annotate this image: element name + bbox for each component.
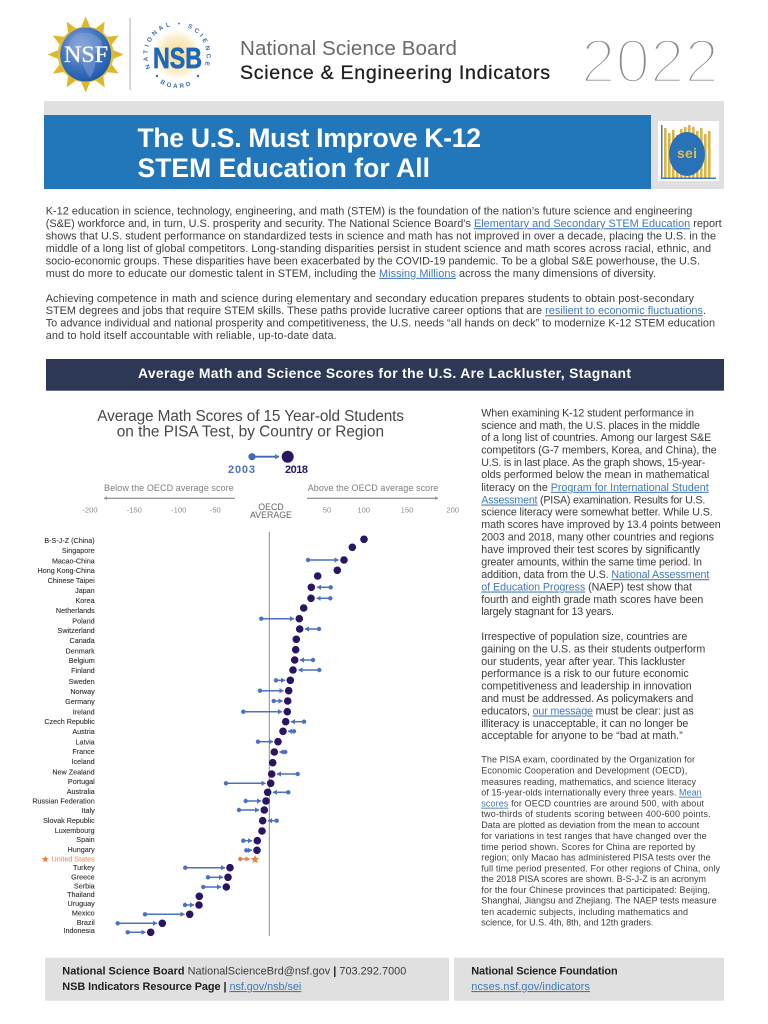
text block: introduction paragraph 1: middle of a long list of global competitors. Long-standing disparities persist in student science and math scores across racial, ethnic, and <box>46 243 711 255</box>
row: Denmark <box>66 646 300 656</box>
row: Latvia <box>76 738 282 746</box>
row: Turkey: Turkey <box>73 863 95 872</box>
text block: right column paragraph 1: have improved their test scores by significantly <box>481 544 701 556</box>
chart title <box>97 408 404 441</box>
row: United States <box>42 854 259 864</box>
divider <box>130 18 131 90</box>
row: Indonesia <box>64 926 154 936</box>
text block: right column paragraph 1: math scores have improved by 13.4 points between <box>481 519 721 531</box>
header: organization names <box>240 37 550 84</box>
text block: introduction paragraph 2 <box>46 293 715 342</box>
text block: right column paragraph 1: literacy on the Program for International Student <box>481 482 709 494</box>
title: The U.S. Must Improve K-12 <box>138 123 481 153</box>
header: organization names: National Science Board <box>240 37 457 60</box>
row: Australia: Australia <box>67 787 95 796</box>
text block: right column paragraph 1: addition, data from the U.S. National Assessment <box>481 569 709 581</box>
icon: SEI logo: sei <box>677 145 697 161</box>
section heading bar <box>46 359 724 391</box>
OECD average label <box>250 502 292 520</box>
row: Hungary: Hungary <box>68 845 95 854</box>
row: Canada: Canada <box>70 636 95 645</box>
row: Poland <box>72 615 303 626</box>
text block: right column paragraph 1 <box>481 408 721 618</box>
row: Thailand <box>67 890 203 900</box>
text block: right column paragraph 1: Assessment (PISA) examination. Results for U.S. <box>481 494 705 506</box>
row: Macao-China: Macao-China <box>52 556 95 566</box>
chart legend: 2018 <box>285 464 308 476</box>
OECD average label: AVERAGE <box>250 510 292 520</box>
axis tick labels: -100 <box>171 506 186 514</box>
text block: right column paragraph 2: illiteracy is unacceptable, it can no longer be <box>481 718 688 730</box>
row: Chinese Taipei: Chinese Taipei <box>48 576 95 585</box>
footer panel: National Science Board: National Science Board NationalScienceBrd@nsf.gov | 703.292.7000 <box>62 966 406 978</box>
text block: right column paragraph 1: largely stagnant for 13 years. <box>481 606 614 618</box>
axis tick labels: 200 <box>446 506 459 514</box>
row: New Zealand <box>52 768 300 778</box>
row: Belgium: Belgium <box>69 656 95 665</box>
axis direction: above average <box>307 483 438 498</box>
text block: right column paragraph 2: our students, year after year. This lackluster <box>481 656 686 668</box>
text block: methodology note: Economic Cooperation and Development (OECD), <box>481 766 687 776</box>
text block: methodology note: two-thirds of students scoring between 400-600 points. <box>481 809 711 819</box>
text block: introduction paragraph 1: must do more to educate our domestic talent in STEM, including the Missing Millions across the many dimensions of diversity. <box>46 268 656 280</box>
text block: methodology note: for variations in test ranges that have changed over the <box>481 831 707 841</box>
text block: methodology note: ten academic subjects, including mathematics and <box>481 907 688 917</box>
footer panel: National Science Board: NSB Indicators Resource Page | nsf.gov/nsb/sei <box>62 981 301 993</box>
row: Slovak Republic: Slovak Republic <box>43 816 95 825</box>
OECD average reference line <box>268 532 270 936</box>
row: Sweden: Sweden <box>69 677 95 686</box>
row: Serbia: Serbia <box>74 882 95 890</box>
row: Hong Kong-China <box>38 566 341 575</box>
text block: methodology note: measures reading, mathematics, and science literacy <box>481 777 696 787</box>
row: Uruguay <box>68 899 203 909</box>
footer panel: National Science Foundation <box>454 958 724 1001</box>
row: France: France <box>72 747 95 756</box>
text block: introduction paragraph 2: To advance individual and national prosperity and competitiveness, the U.S. needs “all hands on deck” to modernize K-12 STEM education <box>46 318 715 330</box>
section heading bar: Average Math and Science Scores for the U.S. Are Lackluster, Stagnant <box>138 365 631 381</box>
row: Denmark: Denmark <box>66 646 95 656</box>
text block: right column paragraph 2 <box>481 631 705 742</box>
text block: right column paragraph 2: acceptable for anyone to be “bad at math.” <box>481 730 683 742</box>
text block: introduction paragraph 2: Achieving competence in math and science during elementary and secondary education prepares students to obtain post-secondary <box>46 293 695 305</box>
text block: methodology note: of 15-year-olds internationally every three years. Mean <box>481 788 702 798</box>
row: Switzerland <box>58 625 321 635</box>
row: Poland: Poland <box>72 616 95 626</box>
row: Finland: Finland <box>71 666 95 675</box>
text block: right column paragraph 1: science and math, the U.S. places in the middle <box>481 420 700 432</box>
text block: introduction paragraph 1: shows that U.S. student performance on standardized tests in science and math has not improved in over a decade, placing the U.S. in the <box>46 230 716 242</box>
row: Hong Kong-China: Hong Kong-China <box>38 566 95 575</box>
axis tick labels: 150 <box>401 506 413 514</box>
row: United States: United States <box>52 854 95 864</box>
row: Iceland: Iceland <box>72 757 95 766</box>
row: Canada <box>70 636 300 645</box>
text block: methodology note: region; only Macao has administered PISA tests over the <box>481 852 711 862</box>
icon: NSF logo: NSF <box>64 42 108 67</box>
footer panel: National Science Foundation: ncses.nsf.gov/indicators <box>471 981 591 993</box>
header: logos <box>48 16 211 92</box>
text block: methodology note: scores for OECD countries are around 500, with about <box>481 799 704 809</box>
icon: SEI logo <box>658 121 719 181</box>
footer panel: National Science Board <box>45 958 449 1001</box>
text block: introduction paragraph 1: K-12 education in science, technology, engineering, and math (STEM) is the foundation of the nation’s future science and engineering <box>46 206 692 218</box>
axis tick labels: -150 <box>127 506 142 514</box>
row: Belgium <box>69 656 315 665</box>
text block: methodology note: full time period presented. For other regions of China, only <box>481 864 720 874</box>
row: Indonesia: Indonesia <box>64 926 95 935</box>
text block: methodology note: the 2018 PISA scores are shown. B-S-J-Z is an acronym <box>481 874 706 884</box>
icon: NSB logo <box>143 22 211 88</box>
axis tick labels: -200 <box>82 506 98 514</box>
row: Iceland <box>72 757 277 766</box>
text block: right column paragraph 1: fourth and eighth grade math scores have been <box>481 594 703 606</box>
text block: introduction paragraph 2: STEM degrees and jobs that require STEM skills. These paths provide lucrative career options that are resilient to economic fluctuations. <box>46 305 706 317</box>
chart legend: 2003 <box>228 464 255 476</box>
row: Luxembourg: Luxembourg <box>55 826 95 835</box>
text block: right column paragraph 2: educators, our message must be clear: just as <box>481 706 694 718</box>
chart: dumbbell plot of country scores <box>32 532 368 936</box>
row: Spain: Spain <box>76 835 95 844</box>
icon: NSF logo <box>48 16 124 92</box>
OECD average label: OECD <box>258 502 284 512</box>
row: Slovak Republic <box>43 816 279 825</box>
row: B-S-J-Z (China) <box>44 536 368 545</box>
row: Singapore <box>62 544 356 555</box>
text block: right column paragraph 1: competitors (G-7 members, Korea, and China), the <box>481 444 717 456</box>
icon: NSB logo: NSB <box>153 43 202 75</box>
row: Mexico: Mexico <box>72 908 95 918</box>
title: STEM Education for All <box>138 153 430 183</box>
text block: right column paragraph 2: gaining on the U.S. as their students outperform <box>481 644 705 656</box>
row: Netherlands <box>56 604 308 615</box>
row: Norway <box>70 687 293 696</box>
row: Portugal <box>68 777 275 787</box>
row: Macao-China <box>52 556 348 566</box>
row: New Zealand: New Zealand <box>52 768 95 776</box>
icon: NSB logo: NATIONAL • SCIENCE <box>143 22 211 70</box>
year: 2022: 2022 <box>581 28 719 96</box>
row: Chinese Taipei <box>48 572 322 585</box>
header: organization names: Science & Engineering Indicators <box>240 62 550 84</box>
row: Australia <box>67 787 290 796</box>
row: Mexico <box>72 908 194 918</box>
row: Sweden <box>69 676 294 686</box>
text block: methodology note: The PISA exam, coordinated by the Organization for <box>481 755 695 765</box>
row: Serbia <box>74 882 230 891</box>
row: Japan <box>75 584 333 595</box>
footer panel: National Science Foundation: National Science Foundation <box>471 966 618 978</box>
row: Russian Federation <box>32 796 270 806</box>
text block: right column paragraph 1: science literacy were somewhat better. While U.S. <box>481 506 713 518</box>
row: Brazil: Brazil <box>77 918 95 927</box>
row: Greece: Greece <box>71 872 95 882</box>
row: Netherlands: Netherlands <box>56 606 95 615</box>
row: Czech Republic: Czech Republic <box>44 717 95 726</box>
chart title: Average Math Scores of 15 Year-old Students <box>97 408 404 425</box>
text block: right column paragraph 1: U.S. is in last place. As the graph shows, 15-year- <box>481 457 706 469</box>
text block: right column paragraph 1: 2003 and 2018, many other countries and regions <box>481 532 714 544</box>
row: Portugal: Portugal <box>68 777 95 786</box>
text block: right column paragraph 1: olds performed below the mean in mathematical <box>481 469 709 481</box>
row: Norway: Norway <box>70 687 95 696</box>
text block: right column paragraph 1: of a long list of countries. Among our largest S&E <box>481 432 711 444</box>
title <box>138 123 481 183</box>
row: Germany: Germany <box>65 697 95 706</box>
row: Italy <box>82 806 268 815</box>
text block: methodology note: science, for U.S. 4th, 8th, and 12th graders. <box>481 918 653 928</box>
row: Uruguay: Uruguay <box>68 899 95 908</box>
axis tick labels: 100 <box>357 506 370 514</box>
text block: right column paragraph 1: of Education Progress (NAEP) test show that <box>481 582 692 594</box>
text block: right column paragraph 2: and must be addressed. As policymakers and <box>481 693 693 705</box>
row: Finland <box>71 666 321 675</box>
row: Ireland: Ireland <box>73 708 95 716</box>
row: Austria: Austria <box>72 727 95 736</box>
row: Switzerland: Switzerland <box>58 626 95 635</box>
icon: NSB logo: BOARD <box>160 80 190 88</box>
row: Japan: Japan <box>75 586 95 595</box>
row: Hungary <box>68 845 261 854</box>
text block: right column paragraph 1: greater amounts, within the same time period. In <box>481 556 702 568</box>
row: Korea: Korea <box>76 596 95 605</box>
row: Ireland <box>73 708 291 716</box>
chart legend <box>228 451 308 476</box>
text block: right column paragraph 2: Irrespective of population size, countries are <box>481 631 687 643</box>
text block: methodology note: for the four Chinese provinces that participated: Beijing, <box>481 885 710 895</box>
row: Germany <box>65 697 292 706</box>
text block: right column paragraph 2: competitiveness and leadership in innovation <box>481 680 692 692</box>
row: Austria <box>72 727 296 736</box>
row: Greece <box>71 872 232 882</box>
axis direction: below average: Below the OECD average score <box>104 483 234 493</box>
text block: introduction paragraph 1: (S&E) workforce and, in turn, U.S. prosperity and security. The National Science Board’s Elementary and Secondary STEM Education report <box>46 218 722 230</box>
text block: introduction paragraph 1: socio-economic groups. These disparities have been exacerbated by the COVID-19 pandemic. To be a global S&E powerhouse, the U.S. <box>46 256 700 268</box>
row: Korea <box>76 594 332 605</box>
text block: right column paragraph 1: When examining K-12 student performance in <box>481 408 694 420</box>
row: Russian Federation: Russian Federation <box>32 796 95 806</box>
axis direction: above average: Above the OECD average score <box>308 483 438 493</box>
row: Singapore: Singapore <box>62 546 95 555</box>
row: Spain <box>76 835 261 844</box>
axis tick labels: -50 <box>210 506 221 514</box>
title banner <box>44 101 724 189</box>
row: Luxembourg <box>55 826 266 835</box>
row: Turkey <box>73 863 234 872</box>
row: Italy: Italy <box>82 806 95 815</box>
row: Thailand: Thailand <box>67 890 95 899</box>
text block: introduction paragraph 2: and to hold itself accountable with reliable, up-to-date data. <box>46 330 337 342</box>
text block: right column paragraph 2: performance is a risk to our future economic <box>481 668 689 680</box>
axis tick labels <box>82 506 459 514</box>
row: Latvia: Latvia <box>76 738 95 746</box>
axis tick labels: 50 <box>323 506 331 514</box>
text block: methodology note <box>481 755 720 928</box>
text block: introduction paragraph 1 <box>46 206 722 280</box>
row: Brazil <box>77 918 166 927</box>
axis direction: below average <box>104 483 235 498</box>
text block: methodology note: Data are plotted as deviation from the mean to account <box>481 820 700 830</box>
text block: methodology note: time period shown. Scores for China are reported by <box>481 842 696 852</box>
row: Czech Republic <box>44 717 306 726</box>
chart title: on the PISA Test, by Country or Region <box>117 424 384 441</box>
row: France <box>72 747 287 756</box>
text block: methodology note: Shanghai, Jiangsu and Zhejiang. The NAEP tests measure <box>481 896 717 906</box>
row: B-S-J-Z (China): B-S-J-Z (China) <box>44 536 95 545</box>
